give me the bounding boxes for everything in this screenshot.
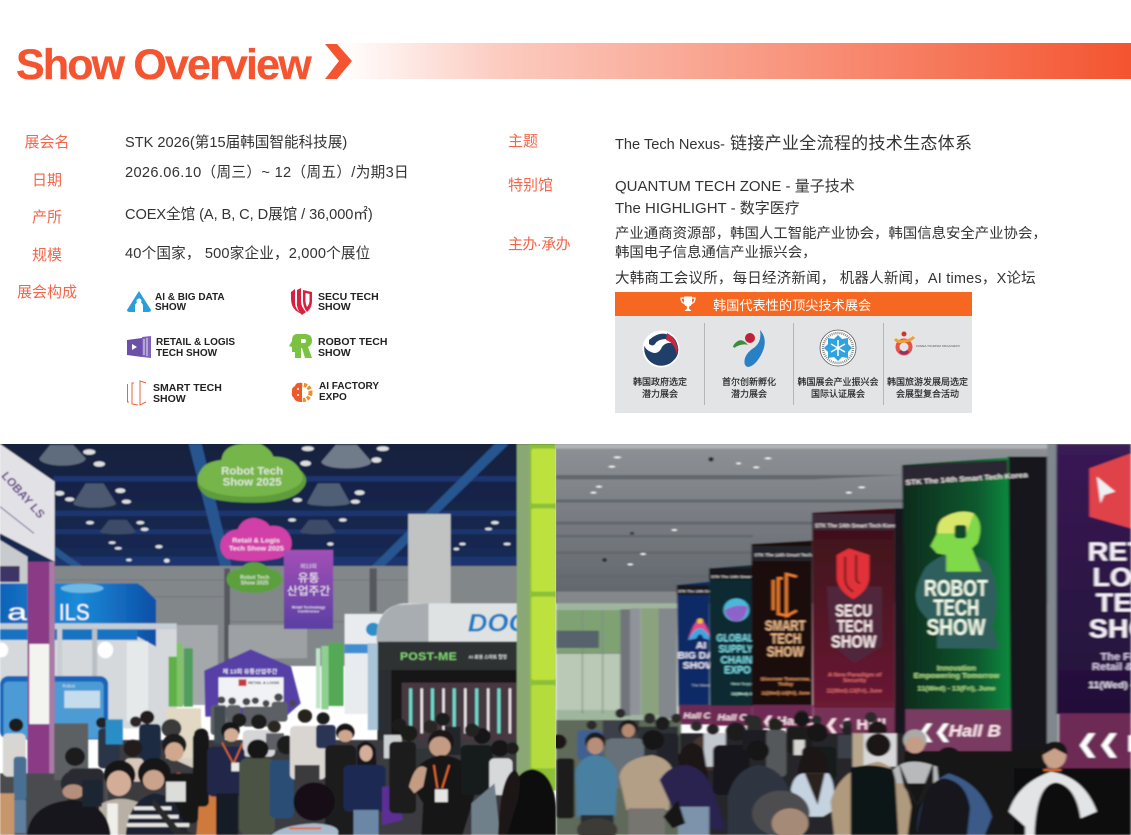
text: Retail and Logis: [156, 337, 235, 359]
ceiling: [0, 440, 556, 568]
banner: purple distribution week: [284, 550, 333, 629]
panel: LED robot tech show: ❮❮: [918, 722, 951, 742]
text: Robot Tech: [318, 336, 387, 358]
text: Smart Tech: SMART TECH: [153, 382, 222, 394]
value: organizers second part: 大韩商工会议所，每日经济新闻， 机器人新闻，AI times，X论坛: [615, 271, 1036, 287]
value: special zone: The HIGHLIGHT - 数字医疗: [615, 200, 800, 217]
panel: LED global supply chain: New Supply Chain: [731, 681, 768, 686]
panel: LED smart tech show: [751, 541, 815, 729]
sign: pink cloud: Tech Show 2025: [229, 546, 284, 553]
value: show name: STK 2026(第15届韩国智能科技展): [125, 135, 347, 151]
panel: LED smart tech show: STK The 14th Smart Tech: [754, 553, 812, 558]
caption: 潜力展会: [731, 389, 767, 399]
caption: 韩国政府选定: [633, 377, 687, 387]
caption: [633, 376, 687, 399]
logo: AI Factory Expo: [292, 381, 379, 402]
label: theme: 主题: [508, 133, 538, 150]
caption: 国际认证展会: [811, 389, 865, 399]
value: organizers: [615, 226, 1047, 261]
text: Secu Tech: SHOW: [318, 301, 351, 313]
photo: exhibition hall with booths: [0, 444, 556, 835]
panel: LED global supply chain: Hall C: [718, 713, 748, 724]
panel: LED robot tech show: SHOW: [927, 615, 986, 641]
text: AI Factory: AI FACTORY: [319, 381, 379, 392]
panel: LED robot tech show: [895, 457, 1131, 835]
panel: LED secu tech show: ❮❮ Hall: [825, 717, 886, 733]
icon: AI big data: [127, 291, 151, 312]
panel: LED AI big data: AI: [696, 641, 707, 651]
panel: LED AI big data: [677, 582, 717, 724]
windows: [556, 603, 677, 720]
logo: Robot Tech Show: [289, 334, 387, 358]
panel: LED global supply chain: STK The 14th Smart: [711, 574, 753, 579]
panel: LED smart tech show: TECH: [771, 631, 801, 647]
label: special zone: 特别馆: [508, 177, 553, 194]
icon: smart brackets: [127, 380, 146, 406]
icon: trophy: [680, 296, 696, 311]
text: Robot Tech: ROBOT TECH: [318, 336, 387, 348]
panel: LED smart tech show: SMART: [765, 618, 806, 634]
value: date: 2026.06.10（周三）~ 12（周五）/为期3日: [125, 165, 409, 181]
header chevron and gradient bar: [325, 43, 1131, 79]
text: AI and Big Data: SHOW: [155, 302, 186, 313]
value: special zone: QUANTUM TECH ZONE - 量子技术: [615, 178, 855, 195]
panel: right details: [508, 133, 1047, 287]
panel: LED global supply chain: 11(Wed)-13(Fri), June: [731, 691, 776, 696]
white column: [408, 514, 451, 604]
panel: LED smart tech show: ❮ Hall D: [762, 715, 815, 729]
panel: LED AI big data: SHOW: [683, 661, 716, 671]
booth: POST-ME dark: DOO: [468, 609, 530, 637]
icon: shield: [291, 288, 312, 315]
caption: [722, 377, 776, 399]
caption: 会展型复合活动: [896, 389, 959, 399]
panel: LED smart tech show: Today: [778, 682, 793, 688]
panel: LED robot tech show: Empowering Tomorrow: [914, 671, 1000, 680]
panel: LED secu tech show: SECU: [835, 601, 872, 620]
icon: government emblem: [642, 330, 680, 368]
panel: LED secu tech show: A New Paradigm of: [828, 673, 881, 679]
text: Secu Tech: SECU TECH: [318, 290, 379, 302]
icon: certification seal: [820, 330, 856, 366]
booth: blue ABILS: Robot: [62, 683, 76, 688]
panel: LED AI big data: Hall C: [683, 711, 711, 720]
panel: LED secu tech show: STK The 14th Smart Tech Korea: [815, 524, 898, 530]
banner: purple distribution week: Retail Technology: [292, 606, 326, 610]
green side banners: [169, 614, 387, 714]
panel: LED secu tech show: SHOW: [831, 631, 877, 651]
caption: 韩国旅游发展局选定: [887, 377, 968, 387]
crowd: [0, 693, 556, 835]
panel: LED AI big data: STK The 14th Smart: [678, 590, 717, 594]
sign: green cloud: Show 2025: [223, 477, 282, 489]
booth: blue ABILS: a: [7, 600, 29, 625]
panel: LED global supply chain: GLOBAL: [717, 631, 753, 644]
panel: LED global supply chain: CHAIN: [721, 653, 752, 666]
panel: LED secu tech show: 11(Wed)-13(Fri), June: [827, 689, 882, 695]
panel: LED AI big data: BIG DA: [678, 651, 714, 662]
booth: POST-ME dark: [368, 603, 530, 747]
value: organizers: 产业通商资源部，韩国人工智能产业协会，韩国信息安全产业协会，: [615, 226, 1047, 242]
text: AI and Big Data: AI & BIG DATA: [155, 292, 225, 302]
sign: green cloud: Robot Tech: [221, 466, 283, 478]
sign: small green cloud: Show 2025: [241, 581, 269, 587]
caption: [797, 376, 878, 399]
banner: [615, 292, 972, 316]
value: venue: COEX全馆 (A, B, C, D展馆 / 36,000㎡): [125, 207, 373, 223]
panel: LED smart tech show: Discover Tomorrow,: [761, 677, 811, 683]
sign: green cloud: [198, 444, 306, 503]
value: special zone: [615, 178, 855, 217]
logo: AI and Big Data Show: [127, 291, 225, 313]
value: theme: The Tech Nexus- 链接产业全流程的技术生态体系: [615, 134, 972, 153]
text: Smart Tech: [153, 382, 222, 404]
icon: retail cube: [127, 336, 151, 358]
text: AI Factory: EXPO: [319, 392, 347, 402]
panel: LED global supply chain: EXPO: [724, 663, 751, 676]
icon: tourism organization: [894, 332, 960, 356]
icon: robot head R: [289, 334, 312, 358]
tent: purple retail week: 제 13회 유통산업주간: [223, 668, 278, 675]
panel: LED global supply chain: SUPPLY: [719, 642, 753, 656]
icon: brain gear: [292, 382, 312, 402]
banner: purple distribution week: 제13회: [300, 562, 317, 570]
panel: LED robot tech show: ROBOT: [924, 576, 988, 602]
label: venue: 产所: [32, 209, 62, 226]
caption: 潜力展会: [642, 389, 678, 399]
sign: pink cloud: [220, 518, 292, 561]
label: date: 日期: [32, 172, 62, 189]
panel: left details: [17, 134, 409, 301]
panel: LED global supply chain: [709, 565, 776, 726]
text: Smart Tech: SHOW: [153, 392, 186, 404]
sign: small green cloud: Robot Tech: [240, 575, 269, 581]
caption: 韩国展会产业振兴会: [797, 377, 878, 387]
caption: 首尔创新孵化: [722, 377, 776, 387]
panel: LED robot tech show: Hall B: [949, 721, 1001, 740]
text: AI and Big Data: [155, 292, 225, 313]
photo: corridor with LED pillars: [556, 444, 1131, 835]
banner: purple distribution week: Conference: [298, 610, 319, 614]
item: exhibition certification: [797, 330, 878, 399]
panel: LED secu tech show: Security: [843, 678, 867, 684]
panel: LED secu tech show: TECH: [837, 616, 873, 636]
green pillar: [517, 444, 556, 791]
sign: pink cloud: Retail & Logis: [232, 538, 280, 545]
value: organizers: 韩国电子信息通信产业振兴会，: [615, 245, 816, 261]
booth: POST-ME dark: AI 로봇 스마트 팔엉: [469, 654, 507, 660]
panel: LED AI big data: The Wave of: [692, 684, 715, 688]
ceiling: [555, 440, 1131, 603]
label: composition: 展会构成: [17, 284, 77, 301]
panel: top technology exhibition: [615, 292, 972, 413]
label: organizers: 主办·承办: [508, 236, 570, 253]
title: Show Overview: [16, 41, 310, 89]
value: scale: 40个国家， 500家企业，2,000个展位: [125, 246, 370, 262]
booth: blue ABILS: ILS: [59, 600, 90, 625]
item: government: [633, 330, 687, 399]
booth: left white sign with purple post: [0, 444, 55, 825]
logo: Secu Tech Show: [291, 288, 379, 315]
text: AI Factory: [319, 381, 379, 402]
label: scale: 规模: [32, 247, 62, 264]
panel: LED robot tech show: TECH: [933, 596, 979, 621]
banner: purple distribution week: 유통: [298, 572, 319, 584]
text: Robot Tech: SHOW: [318, 346, 351, 358]
logo: Retail and Logis Tech Show: [127, 336, 235, 359]
item: Seoul: [722, 330, 776, 399]
text: Secu Tech: [318, 290, 379, 313]
panel: LED smart tech show: SHOW: [767, 644, 804, 660]
item: tourism: [887, 332, 968, 399]
text: Retail and Logis: RETAIL & LOGIS: [156, 337, 235, 348]
banner heading: 韩国代表性的顶尖技术展会: [713, 298, 871, 312]
booth: blue ABILS: [0, 583, 177, 739]
banner: purple distribution week: 산업주간: [287, 585, 331, 597]
tent: purple retail week: RETAIL & LOGIS: [248, 681, 280, 685]
panel: LED smart tech show: 11(Wed)-13(Fri), June: [762, 691, 810, 695]
logo: Smart Tech Show: [127, 380, 222, 406]
back wall: [54, 566, 518, 666]
panel: LED secu tech show: [812, 508, 898, 739]
icon: Seoul logo: [733, 330, 765, 367]
booth: POST-ME dark: POST-ME: [400, 650, 457, 663]
label: show name: 展会名: [24, 134, 70, 151]
panel: LED robot tech show: 11(Wed) - 13(Fri), June: [917, 686, 996, 693]
sign: small green cloud: [227, 562, 282, 593]
text: Retail and Logis: TECH SHOW: [156, 348, 217, 359]
caption: [887, 376, 968, 399]
tent: purple retail week: [204, 649, 301, 717]
panel: LED robot tech show: Innovation: [937, 664, 976, 673]
panel: LED retail and logis: [1014, 444, 1131, 835]
dividers: [704, 323, 884, 405]
panel: LED robot tech show: STK The 14th Smart Tech Korea: [905, 471, 1029, 487]
crowd: [550, 709, 1097, 835]
